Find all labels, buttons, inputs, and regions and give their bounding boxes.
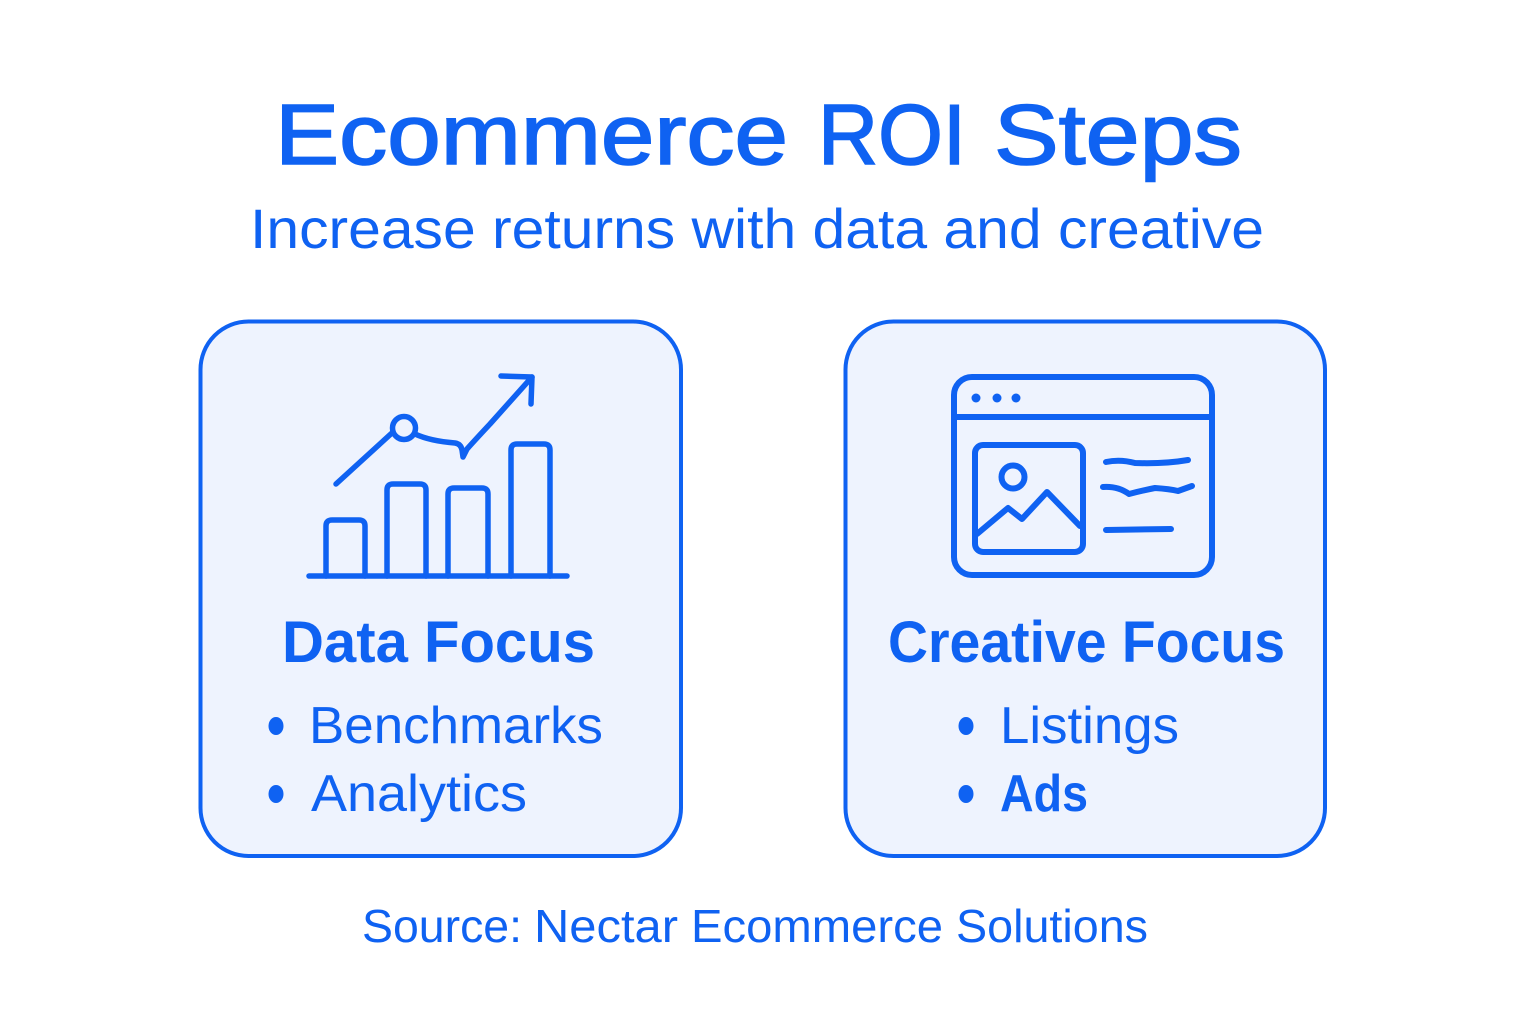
item: listings: Listings xyxy=(1000,697,1179,755)
subtitle: Increase returns with data and creative xyxy=(250,197,1264,260)
source note: Solutions xyxy=(956,900,1148,952)
panel: data focus xyxy=(200,322,681,856)
icon: browser window with image and text xyxy=(954,377,1212,575)
bullet xyxy=(958,717,974,735)
source note: Source: xyxy=(362,900,522,952)
panel background xyxy=(200,322,681,856)
panel: creative focus xyxy=(846,322,1325,856)
bullet xyxy=(958,785,974,803)
heading: data focus: Data Focus xyxy=(282,610,595,675)
title: ROI xyxy=(818,88,966,183)
title: Steps xyxy=(994,88,1242,183)
title: Ecommerce xyxy=(275,88,788,183)
heading: creative focus: Creative Focus xyxy=(888,610,1285,675)
bullet xyxy=(268,717,284,735)
item: benchmarks: Benchmarks xyxy=(309,697,603,755)
item: analytics: Analytics xyxy=(311,765,527,823)
item: ads: Ads xyxy=(1000,765,1088,823)
list: data items xyxy=(268,697,603,823)
source note: Ecommerce xyxy=(691,900,943,952)
bullet xyxy=(268,785,284,803)
source note: Nectar xyxy=(534,900,678,952)
icon: bar chart with rising arrow xyxy=(309,376,567,576)
list: creative items xyxy=(958,697,1179,823)
panel background xyxy=(846,322,1325,856)
